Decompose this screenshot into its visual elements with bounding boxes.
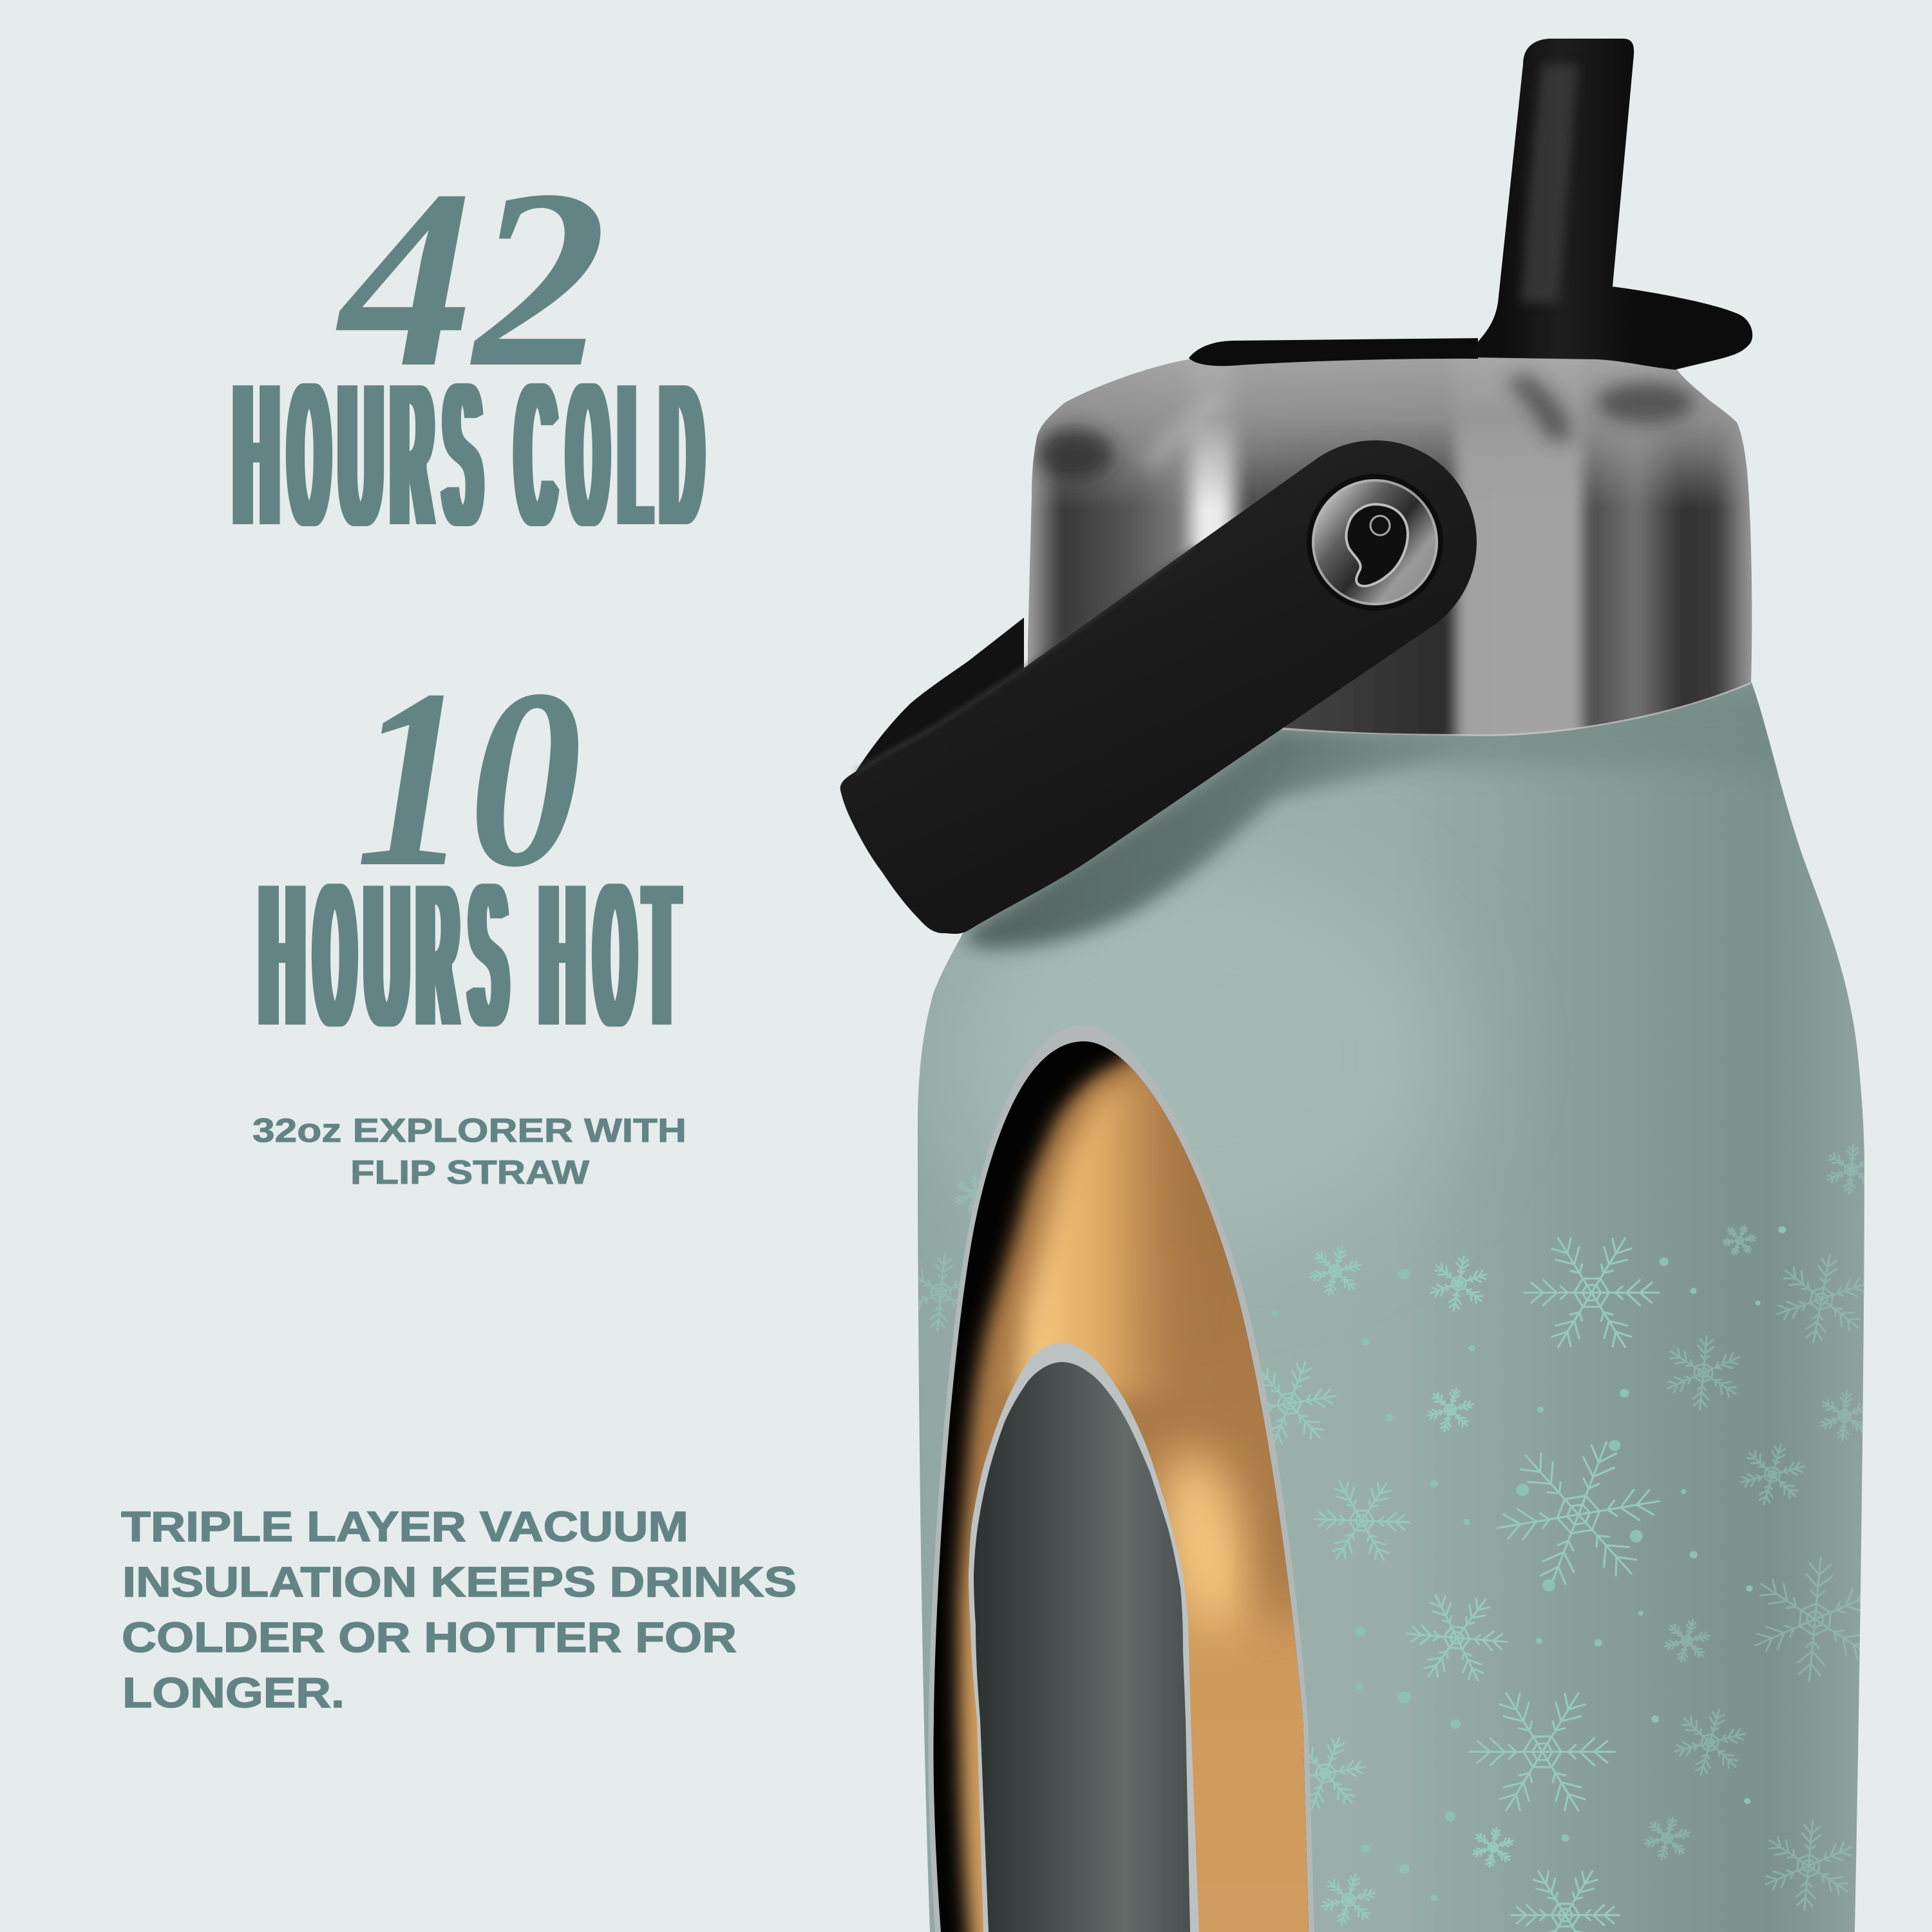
heading: hours hot (260, 838, 678, 1072)
cutaway: dark interior (974, 1362, 1190, 1932)
insulation description: COLDER OR HOTTER FOR (122, 1613, 737, 1661)
insulation description: TRIPLE LAYER VACUUM (121, 1502, 688, 1550)
product name (252, 1112, 687, 1191)
insulation description: INSULATION KEEPS DRINKS (122, 1558, 797, 1605)
heading: hours cold: O (290, 337, 328, 571)
infographic canvas: T (645, 838, 678, 1072)
handle strap (840, 440, 1477, 934)
heading: hours cold: C (516, 337, 556, 571)
stat: 42 hours cold (234, 137, 703, 571)
cutaway: outer silver rim (928, 1025, 1314, 1932)
infographic canvas: D (661, 337, 703, 571)
heading: hours cold: O (569, 337, 608, 571)
number 42: 42 (336, 137, 607, 420)
insulation description (121, 1502, 797, 1716)
heading: hours hot: S (470, 838, 507, 1072)
metal cap (1005, 322, 1777, 773)
heading: hours cold: S (444, 337, 481, 571)
rivet with logo (1307, 474, 1443, 611)
number 10: 10 (355, 636, 582, 920)
product name: 32oz EXPLORER WITH (252, 1112, 687, 1150)
cutaway: inner silver rim (969, 1343, 1199, 1932)
heading: hours cold: L (620, 337, 650, 571)
snowflake pattern (898, 1142, 1884, 1932)
bottle body (898, 670, 1884, 1932)
handle shadow (968, 730, 1494, 949)
heading: hours hot: U (366, 838, 408, 1072)
stat: 10 hours hot (260, 636, 678, 1072)
heading: hours hot: H (540, 838, 584, 1072)
cutaway: black air gap and copper layer (934, 1041, 1309, 1932)
heading: hours hot: O (596, 838, 635, 1072)
heading: hours hot: R (418, 838, 458, 1072)
bottle illustration (840, 39, 1884, 1932)
flip straw (1470, 39, 1752, 370)
product name: FLIP STRAW (350, 1154, 590, 1191)
heading: hours cold: H (234, 337, 278, 571)
heading: hours cold: R (392, 337, 433, 571)
insulation description: LONGER. (122, 1669, 345, 1716)
heading: hours hot: O (316, 838, 354, 1072)
drink slot (1189, 338, 1478, 366)
heading: hours cold: U (340, 337, 382, 571)
copper layer (959, 1030, 1352, 1932)
heading: hours hot: H (260, 838, 304, 1072)
heading: hours cold (234, 337, 703, 571)
